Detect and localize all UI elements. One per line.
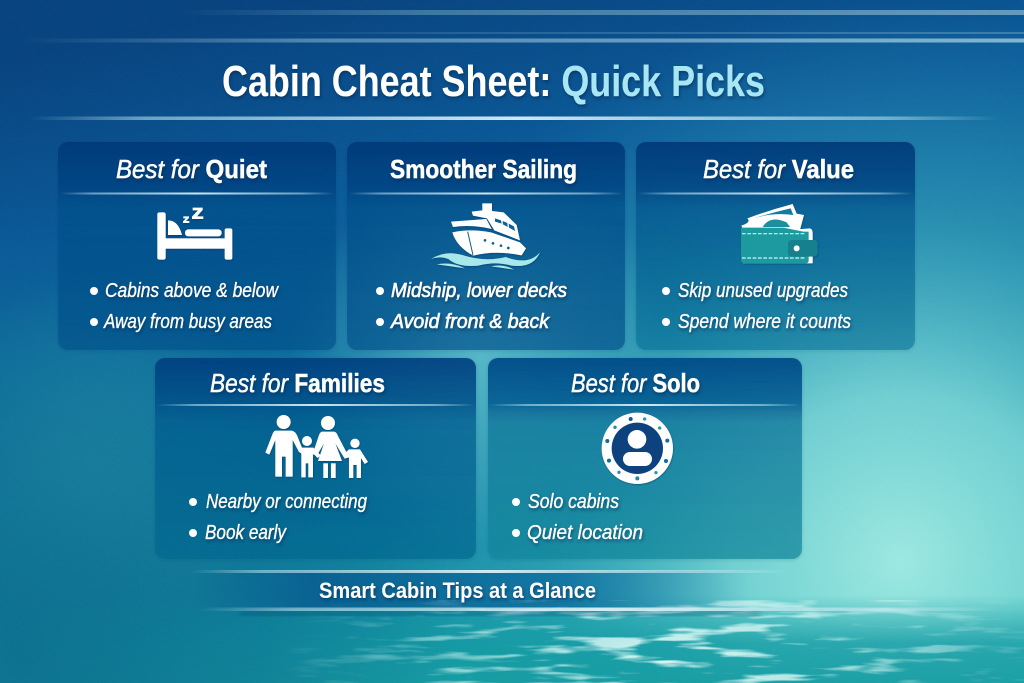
footer text: Smart Cabin Tips at a Glance	[319, 578, 596, 603]
icon: wallet with cash	[741, 204, 818, 263]
title: Cabin Cheat Sheet: Quick Picks	[222, 57, 765, 106]
list: value tips	[662, 280, 851, 333]
list: value tips: Skip unused upgrades	[678, 280, 848, 302]
list: smoother sailing tips: Avoid front & back	[390, 311, 550, 333]
heading: best for solo: Best for Solo	[571, 368, 700, 398]
icon: bed with z's	[157, 208, 232, 260]
footer banner	[190, 570, 1000, 616]
list: quiet tips: Cabins above & below	[105, 280, 279, 302]
title underline	[30, 116, 1000, 120]
list: solo tips: Quiet location	[527, 522, 643, 544]
panel: best for solo	[488, 358, 802, 559]
list: family tips	[189, 491, 367, 544]
panel: best for value	[636, 142, 915, 350]
heading: best for quiet: Best for Quiet	[116, 154, 267, 184]
top decorative streaks	[20, 10, 1024, 42]
icon: porthole with person	[602, 413, 673, 484]
list: quiet tips	[90, 280, 279, 333]
heading: best for families: Best for Families	[210, 368, 385, 398]
list: family tips: Book early	[205, 522, 287, 544]
heading: best for value: Best for Value	[703, 154, 854, 184]
icon: cruise ship on waves	[431, 203, 540, 270]
list: solo tips: Solo cabins	[528, 491, 619, 513]
panel: best for families	[155, 358, 476, 559]
list: solo tips	[512, 491, 643, 544]
panel: best for quiet	[58, 142, 336, 350]
list: value tips: Spend where it counts	[678, 311, 851, 333]
list: smoother sailing tips	[376, 280, 567, 333]
list: smoother sailing tips: Midship, lower decks	[391, 280, 567, 302]
panel: smoother sailing	[347, 142, 625, 350]
list: family tips: Nearby or connecting	[206, 491, 367, 513]
icon: family of four	[265, 415, 368, 478]
list: quiet tips: Away from busy areas	[103, 311, 272, 333]
heading: smoother sailing: Smoother Sailing	[390, 154, 577, 184]
